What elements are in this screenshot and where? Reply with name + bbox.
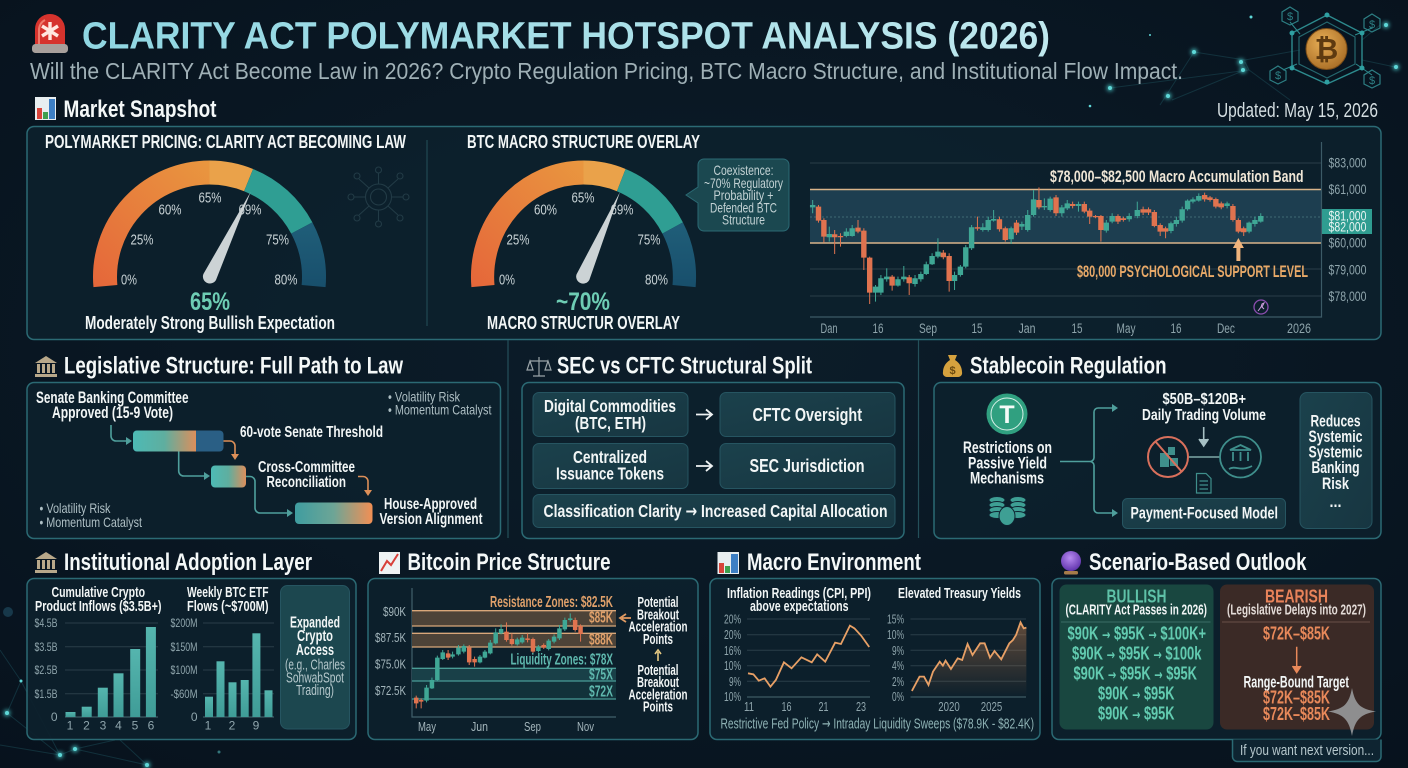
icon: coins [989,496,1026,526]
zone labels: Liquidity Zones: $78X [510,652,613,668]
arrow: up [655,650,661,661]
section: institutional adoption [27,549,356,740]
box: expanded crypto access [280,586,350,729]
chart: cumulative inflows: 3 [100,718,107,732]
chart: weekly ETF flows: Weekly BTC ETF [187,584,268,601]
icon: bitcoin network: ₿ [1315,34,1338,66]
chart: BTC candlesticks [810,142,1372,336]
icon: market bars [35,97,56,120]
chart: treasury yields: 2% [892,674,904,689]
gauge: polymarket pricing [45,132,406,333]
panel: path to law: • Volatility Risk [40,500,111,516]
axis labels: Jun [471,719,488,734]
heading: Macro Environment [747,549,921,576]
icon: bank in hand [1220,436,1261,478]
time axis [820,321,1311,336]
chart: weekly ETF flows: 2 [229,718,236,732]
subtitle: Will the CLARITY Act Become Law in 2026? Crypto Regulation Pricing, BTC Macro Structure, and Institutional Flow Impact. [30,58,1183,84]
chart: inflation: 10% [724,658,741,673]
title: CLARITY ACT POLYMARKET HOTSPOT ANALYSIS (2026) [82,16,1050,58]
panel: path to law: Senate Banking Committee [36,389,188,407]
gauge heading: BTC MACRO STRUCTURE OVERLAY [467,132,700,152]
box: systemic risk: Banking [1312,459,1360,477]
step bar: house version [295,502,372,524]
gauge: btc macro overlay: 25% [506,232,530,248]
connector: branch [1060,404,1118,517]
icon: crystal ball [1061,551,1081,574]
chart: inflation: 16% [724,643,741,658]
time axis: Sep [919,321,937,336]
box: systemic risk: ... [1330,493,1342,511]
gauge: btc macro overlay: 69% [610,202,634,218]
box: digital commodities [533,392,688,436]
chart: treasury yields: 0% [892,689,904,704]
box: centralized tokens [533,444,688,488]
box: CFTC oversight [720,392,895,436]
price axis [1322,156,1372,304]
axis labels: Sep [524,719,541,734]
box: CFTC oversight: CFTC Oversight [752,405,862,425]
zone labels: $72X [589,684,613,700]
text: restrictions [963,439,1052,488]
chart: cumulative inflows: $1.5B [34,687,58,701]
box: expanded crypto access: SohwabSpot [286,670,344,686]
text: restrictions: Mechanisms [970,470,1044,488]
price axis: $81,000 [1328,208,1366,224]
candles [414,613,583,708]
price axis: $61,000 [1328,182,1366,197]
box: payment model [1122,498,1286,528]
box: expanded crypto access: (e.g., Charles [285,658,345,674]
panel: path to law [27,382,500,538]
box: centralized tokens: Centralized [573,447,647,467]
text: breakout points lower: Acceleration [628,686,688,704]
chart: inflation: 10% [724,689,741,704]
text: breakout points lower [628,662,688,716]
icon: faint network [348,167,409,227]
card: bearish: $72K–$85K [1263,704,1330,724]
arrow [696,461,712,471]
price axis: $82,000 [1328,220,1366,234]
gauge: btc macro overlay: 75% [638,232,661,248]
callout: coexistence: ~70% Regulatory [704,175,783,191]
gauge: polymarket pricing: 60% [158,202,182,218]
icon: scales [527,357,551,376]
axis labels: $90K [383,604,406,619]
panel: path to law: Version Alignment [380,511,483,528]
box: digital commodities: Digital Commodities [544,396,676,416]
gauge: btc macro overlay [467,132,700,333]
box: digital commodities: (BTC, ETH) [575,413,646,433]
chart: treasury yields: 2020 [938,699,960,714]
price axis: $78,000 [1328,289,1366,304]
icon: bitcoin network: $ [1275,70,1281,82]
text: breakout points lower: Breakout [637,674,679,691]
chart: weekly ETF flows: $100M [170,663,198,677]
chart: weekly ETF flows: 1 [205,718,212,732]
box: expanded crypto access: Trading) [296,683,334,699]
chart: treasury yields: Elevated Treasury Yields [898,585,1021,602]
chart: cumulative inflows: 5 [132,718,139,732]
text: breakout points lower: Potential [638,662,678,679]
callout: coexistence [686,159,789,231]
text: breakout points lower: Points [643,698,673,716]
chart: cumulative inflows [34,584,162,732]
axis labels: $72.5K [375,683,406,698]
section: bitcoin price structure [368,549,698,740]
chart: inflation: above expectations [750,598,848,615]
chart: weekly ETF flows: $150M [170,640,198,654]
heading: Bitcoin Price Structure [408,549,610,576]
chart: cumulative inflows: 4 [115,718,122,732]
panel: outlook [1052,578,1381,740]
chart: inflation: 20% [724,612,741,626]
box: expanded crypto access: Expanded [290,614,340,632]
chart: inflation [724,585,871,714]
box: systemic risk: Risk [1322,475,1350,493]
heading: Institutional Adoption Layer [64,549,312,576]
arrow: down [1199,427,1208,446]
panel: path to law: Reconciliation [266,474,346,491]
box: systemic risk: Systemic [1308,428,1362,446]
callout: coexistence: Coexistence: [714,162,774,178]
gauge value: ~70% [556,288,610,316]
chart: treasury yields: 10% [887,627,904,642]
chart: treasury yields: 2025 [981,699,1002,714]
network decoration bottom left [0,607,220,768]
chart: cumulative inflows: $4.5B [34,616,58,630]
chart: cumulative inflows: 1 [67,718,74,732]
candles [810,187,1263,304]
panel: path to law: Cross-Committee [258,459,355,476]
next version tab [1232,740,1381,762]
chart: treasury yields: 4% [892,658,904,673]
axis labels: $75.0K [375,656,406,672]
time axis: 16 [1170,321,1182,336]
chart: cumulative inflows: $3.5B [34,640,58,654]
chart: cumulative inflows: Product Inflows ($3.5B+) [35,598,162,615]
heading: Legislative Structure: Full Path to Law [64,352,403,380]
icon: sparkle watermark [1328,688,1376,736]
gauge: polymarket pricing: 75% [266,232,289,248]
heading: SEC vs CFTC Structural Split [557,352,812,380]
box: systemic risk: Reduces [1310,412,1360,430]
section dividers [508,340,918,538]
zone labels [490,594,614,700]
card: bearish: BEARISH [1265,586,1328,606]
card: bullish: $90K → $95K [1098,684,1174,704]
chart: cumulative inflows: 6 [148,718,155,732]
arrow: support [1233,238,1244,261]
time axis: 16 [872,321,884,336]
section: SEC vs CFTC [522,352,904,538]
gauge: btc macro overlay: 60% [534,202,557,218]
heading: Market Snapshot: Market Snapshot [64,96,217,123]
panel: path to law: • Volatility Risk [388,388,461,404]
chart: treasury yields [887,585,1026,714]
chart: zones and candles [412,588,616,717]
heading: Stablecoin Regulation [970,352,1166,380]
time axis: 2026 [1287,321,1311,336]
text: trading volume [1142,391,1266,424]
icon: document [1196,474,1211,493]
axis labels: $87.5K [375,630,406,645]
zone labels: $88K [589,632,614,648]
chart: treasury yields: 9% [892,643,904,658]
icon: purple badge [1254,300,1268,314]
text: trading volume: Daily Trading Volume [1142,407,1266,424]
step bar: reconciliation [211,466,246,488]
icon: money bag: $ [949,365,956,377]
card: bullish: BULLISH [1106,586,1166,606]
callout: coexistence: Probability + [714,187,774,203]
axis labels [375,604,594,734]
chart: weekly ETF flows: 0 [191,710,198,724]
zone labels: Resistance Zones: $82.5K [490,594,614,611]
text: trading volume: $50B–$120B+ [1162,391,1246,408]
box: SEC jurisdiction: SEC Jurisdiction [750,456,864,476]
box: SEC jurisdiction [720,444,895,488]
panel: stablecoin [934,382,1381,538]
icon: bitcoin network: $ [1287,11,1293,23]
card: bullish: $90K → $95K → $100K+ [1068,624,1206,644]
footer note: Restrictive Fed Policy → Intraday Liquidity Sweeps ($78.9K - $82.4K) [720,714,1034,732]
section: macro environment [710,549,1040,740]
panel: split [522,382,904,538]
icon: chart up [379,552,400,574]
section: scenario outlook [1052,549,1381,762]
heading: Scenario-Based Outlook [1089,549,1307,576]
icon: tether: T [999,401,1015,429]
time axis: Dec [1217,321,1235,336]
chart: cumulative inflows: 2 [83,718,90,732]
text: breakout points upper: Potential [638,594,678,611]
chart: weekly ETF flows [170,584,274,732]
gauge heading: POLYMARKET PRICING: CLARITY ACT BECOMING LAW [45,132,406,152]
box: classification clarity [533,494,895,528]
card: bullish: $90K → $95K → $100k [1072,644,1202,664]
card: bullish: $90K → $95K [1098,704,1174,724]
card: bullish: (CLARITY Act Passes in 2026) [1066,602,1207,618]
panel: path to law: • Momentum Catalyst [40,514,142,530]
gauge: polymarket pricing: 0% [121,272,137,288]
chart: cumulative inflows: $2.5B [34,663,58,677]
chart: inflation: 11 [744,699,754,714]
section: stablecoin [934,352,1381,538]
panel: path to law: House-Approved [384,496,477,513]
next version tab: If you want next version... [1240,742,1374,759]
text: breakout points upper: Points [643,631,673,648]
icon: bitcoin network: $ [1369,75,1375,87]
panel: path to law: 60-vote Senate Threshold [240,424,383,441]
box: expanded crypto access: Access [296,642,334,659]
price axis: $83,000 [1328,156,1366,170]
chart: inflation: 21 [818,699,828,714]
callout: coexistence: Structure [722,212,765,228]
zone labels: $85K [589,610,614,626]
gauge caption: MACRO STRUCTUR OVERLAY [487,313,680,333]
box: classification clarity: Classification Clarity → Increased Capital Allocation [544,501,887,522]
gauge: polymarket pricing: 69% [238,202,262,218]
axis labels: May [418,719,436,734]
panel: path to law: • Momentum Catalyst [388,402,492,418]
gauge: btc macro overlay: 0% [499,272,515,288]
arrow: left [620,614,631,622]
panel: path to law: Approved (15-9 Vote) [52,404,173,422]
gauge value: 65% [190,288,230,316]
box: systemic risk [1300,392,1372,528]
price axis: $79,000 [1328,262,1366,278]
axis labels: Nov [577,719,594,734]
icon: bitcoin network [1270,7,1380,88]
gauge: btc macro overlay: 80% [645,272,668,288]
text: breakout points upper: Acceleration [628,618,688,636]
icon: tether [986,394,1028,434]
chart: inflation: 9% [729,674,741,689]
gauge: polymarket pricing: 80% [274,272,298,288]
text: breakout points upper: Breakout [637,606,679,624]
time axis: 15 [1072,321,1082,336]
box: expanded crypto access: Crypto [297,628,333,645]
box: systemic risk: Systemic [1308,444,1362,462]
callout: coexistence: Defended BTC [710,200,777,216]
icon: bank building [35,356,57,377]
chart: inflation: 23 [856,699,866,714]
gauge: btc macro overlay: 65% [572,190,595,206]
gauge: polymarket pricing: 25% [130,232,154,248]
card: bearish: $72K–$85K [1263,624,1330,644]
time axis: May [1116,321,1136,336]
panel: price structure [368,578,698,740]
gauge: polymarket pricing: 65% [198,190,222,206]
connectors [111,425,372,517]
text: restrictions: Restrictions on [963,439,1052,457]
price axis: $60,000 [1328,236,1366,250]
chart: inflation: Inflation Readings (CPI, PPI) [727,585,871,602]
box: payment model: Payment-Focused Model [1130,504,1278,522]
text: breakout points upper [628,594,688,648]
icon: money bag [943,355,962,377]
chart: inflation: 20% [724,627,741,642]
chart: cumulative inflows: 0 [51,710,58,724]
network decoration top right [1089,16,1399,107]
box: centralized tokens: Issuance Tokens [556,464,664,484]
panel: market snapshot [27,126,1381,340]
zone labels: $75X [589,666,613,684]
time axis: Dan [820,321,838,336]
card: bullish [1060,584,1214,730]
icon: prohibited [1148,437,1188,477]
icon: bitcoin network: $ [1369,19,1375,31]
step bar: senate committee [133,430,224,452]
chart: weekly ETF flows: $200M [170,616,198,630]
card: bearish: Range-Bound Target [1244,674,1349,692]
text: restrictions: Passive Yield [968,454,1047,472]
time axis: Jan [1018,321,1036,336]
panel: macro [710,578,1040,740]
chart: inflation: 16 [782,699,792,714]
panel: adoption [27,578,356,740]
gauge caption: Moderately Strong Bullish Expectation [85,313,335,333]
section: legislative structure [27,352,500,538]
time axis: 15 [972,321,982,336]
icon: bank building [35,552,57,573]
card: bearish: $72K–$85K [1263,688,1330,708]
chart: cumulative inflows: Cumulative Crypto [52,584,145,601]
icon: macro bars [718,552,739,574]
band label: $78,000–$82,500 Macro Accumulation Band [1050,167,1304,186]
icon: siren [32,14,68,53]
chart: weekly ETF flows: Flows (~$700M) [187,598,268,615]
chart: treasury yields: 15% [887,612,904,626]
chart: weekly ETF flows: 9 [253,718,260,732]
card: bullish: $90K → $95K → $95K [1074,664,1197,684]
card: bearish [1220,584,1374,730]
chart: weekly ETF flows: -$60M [170,687,198,701]
arrow [696,410,712,420]
